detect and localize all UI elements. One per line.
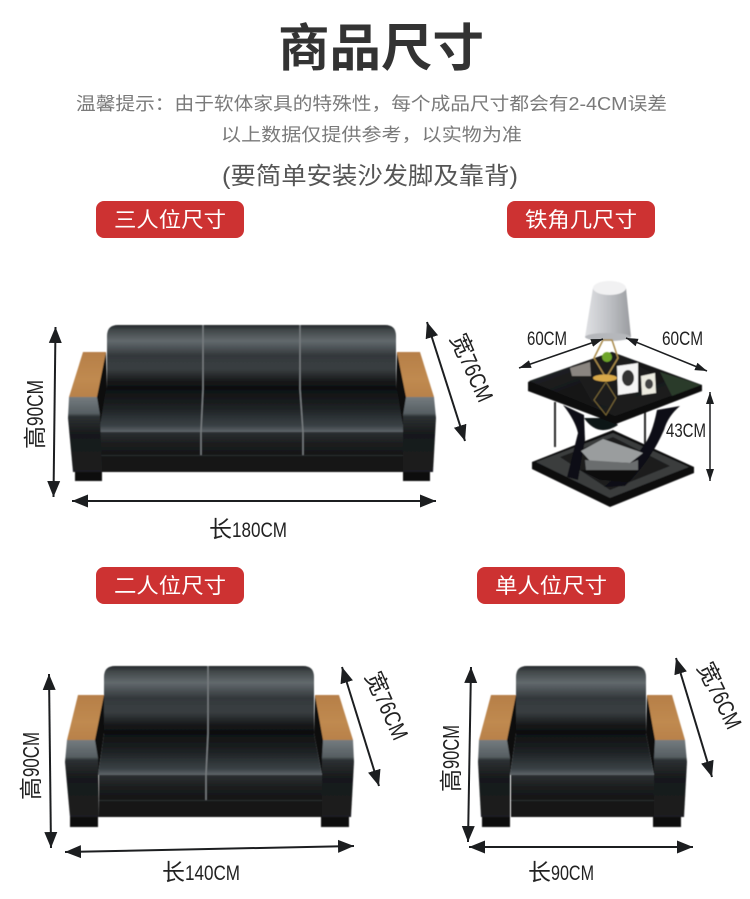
arrow: table height [709, 392, 711, 481]
label: table right width: 60CM [662, 329, 703, 350]
badge: three-seater [96, 201, 244, 238]
label: table height: 43CM [666, 421, 706, 442]
books [580, 439, 643, 482]
arrow: single-seater depth [676, 658, 712, 777]
label: three-seater depth: 宽76CM [445, 329, 498, 406]
two-seater sofa [65, 666, 354, 827]
badge: three-seater: 三人位尺寸 [114, 209, 226, 232]
label: single-seater height: 高90CM [438, 725, 464, 792]
arrow: two-seater length [65, 846, 354, 852]
arrow: single-seater height [468, 667, 471, 842]
arrow: table right width [626, 338, 707, 371]
badge: two-seater: 二人位尺寸 [114, 575, 226, 598]
single-seater sofa [478, 666, 687, 827]
label: single-seater length: 长90CM [528, 859, 594, 885]
badge: side table: 铁角几尺寸 [525, 209, 637, 232]
label: two-seater height: 高90CM [18, 732, 44, 800]
picture frames [617, 363, 656, 395]
note: data reference: 以上数据仅提供参考，以实物为准 [221, 125, 522, 145]
arrow: table left width [519, 339, 603, 368]
note: size tolerance: 温馨提示：由于软体家具的特殊性，每个成品尺寸都会有2-4CM误差 [76, 94, 667, 114]
table poles [555, 402, 645, 458]
three-seater sofa [68, 325, 436, 481]
label: two-seater depth: 宽76CM [360, 667, 413, 744]
side table [528, 281, 702, 507]
arrow: three-seater height [54, 327, 56, 497]
title: 商品尺寸 [278, 20, 484, 77]
note: assembly: (要简单安装沙发脚及靠背) [222, 163, 518, 190]
arrow: single-seater length [469, 846, 693, 848]
table x frame [563, 405, 680, 487]
badge: single seater [477, 567, 625, 604]
arrow: three-seater depth [427, 322, 465, 441]
arrow: three-seater length [72, 500, 436, 502]
label: three-seater height: 高90CM [22, 380, 48, 449]
badge: side table [507, 201, 655, 238]
badge: single seater: 单人位尺寸 [495, 575, 607, 598]
arrow: two-seater height [49, 674, 51, 848]
arrow: two-seater depth [342, 667, 379, 786]
label: two-seater length: 长140CM [162, 859, 240, 885]
label: three-seater length: 长180CM [209, 516, 287, 542]
badge: two-seater [96, 567, 244, 604]
lamp [585, 281, 631, 415]
label: table left width: 60CM [527, 329, 567, 350]
table top glass [528, 352, 702, 424]
table lower shelf [532, 430, 694, 507]
